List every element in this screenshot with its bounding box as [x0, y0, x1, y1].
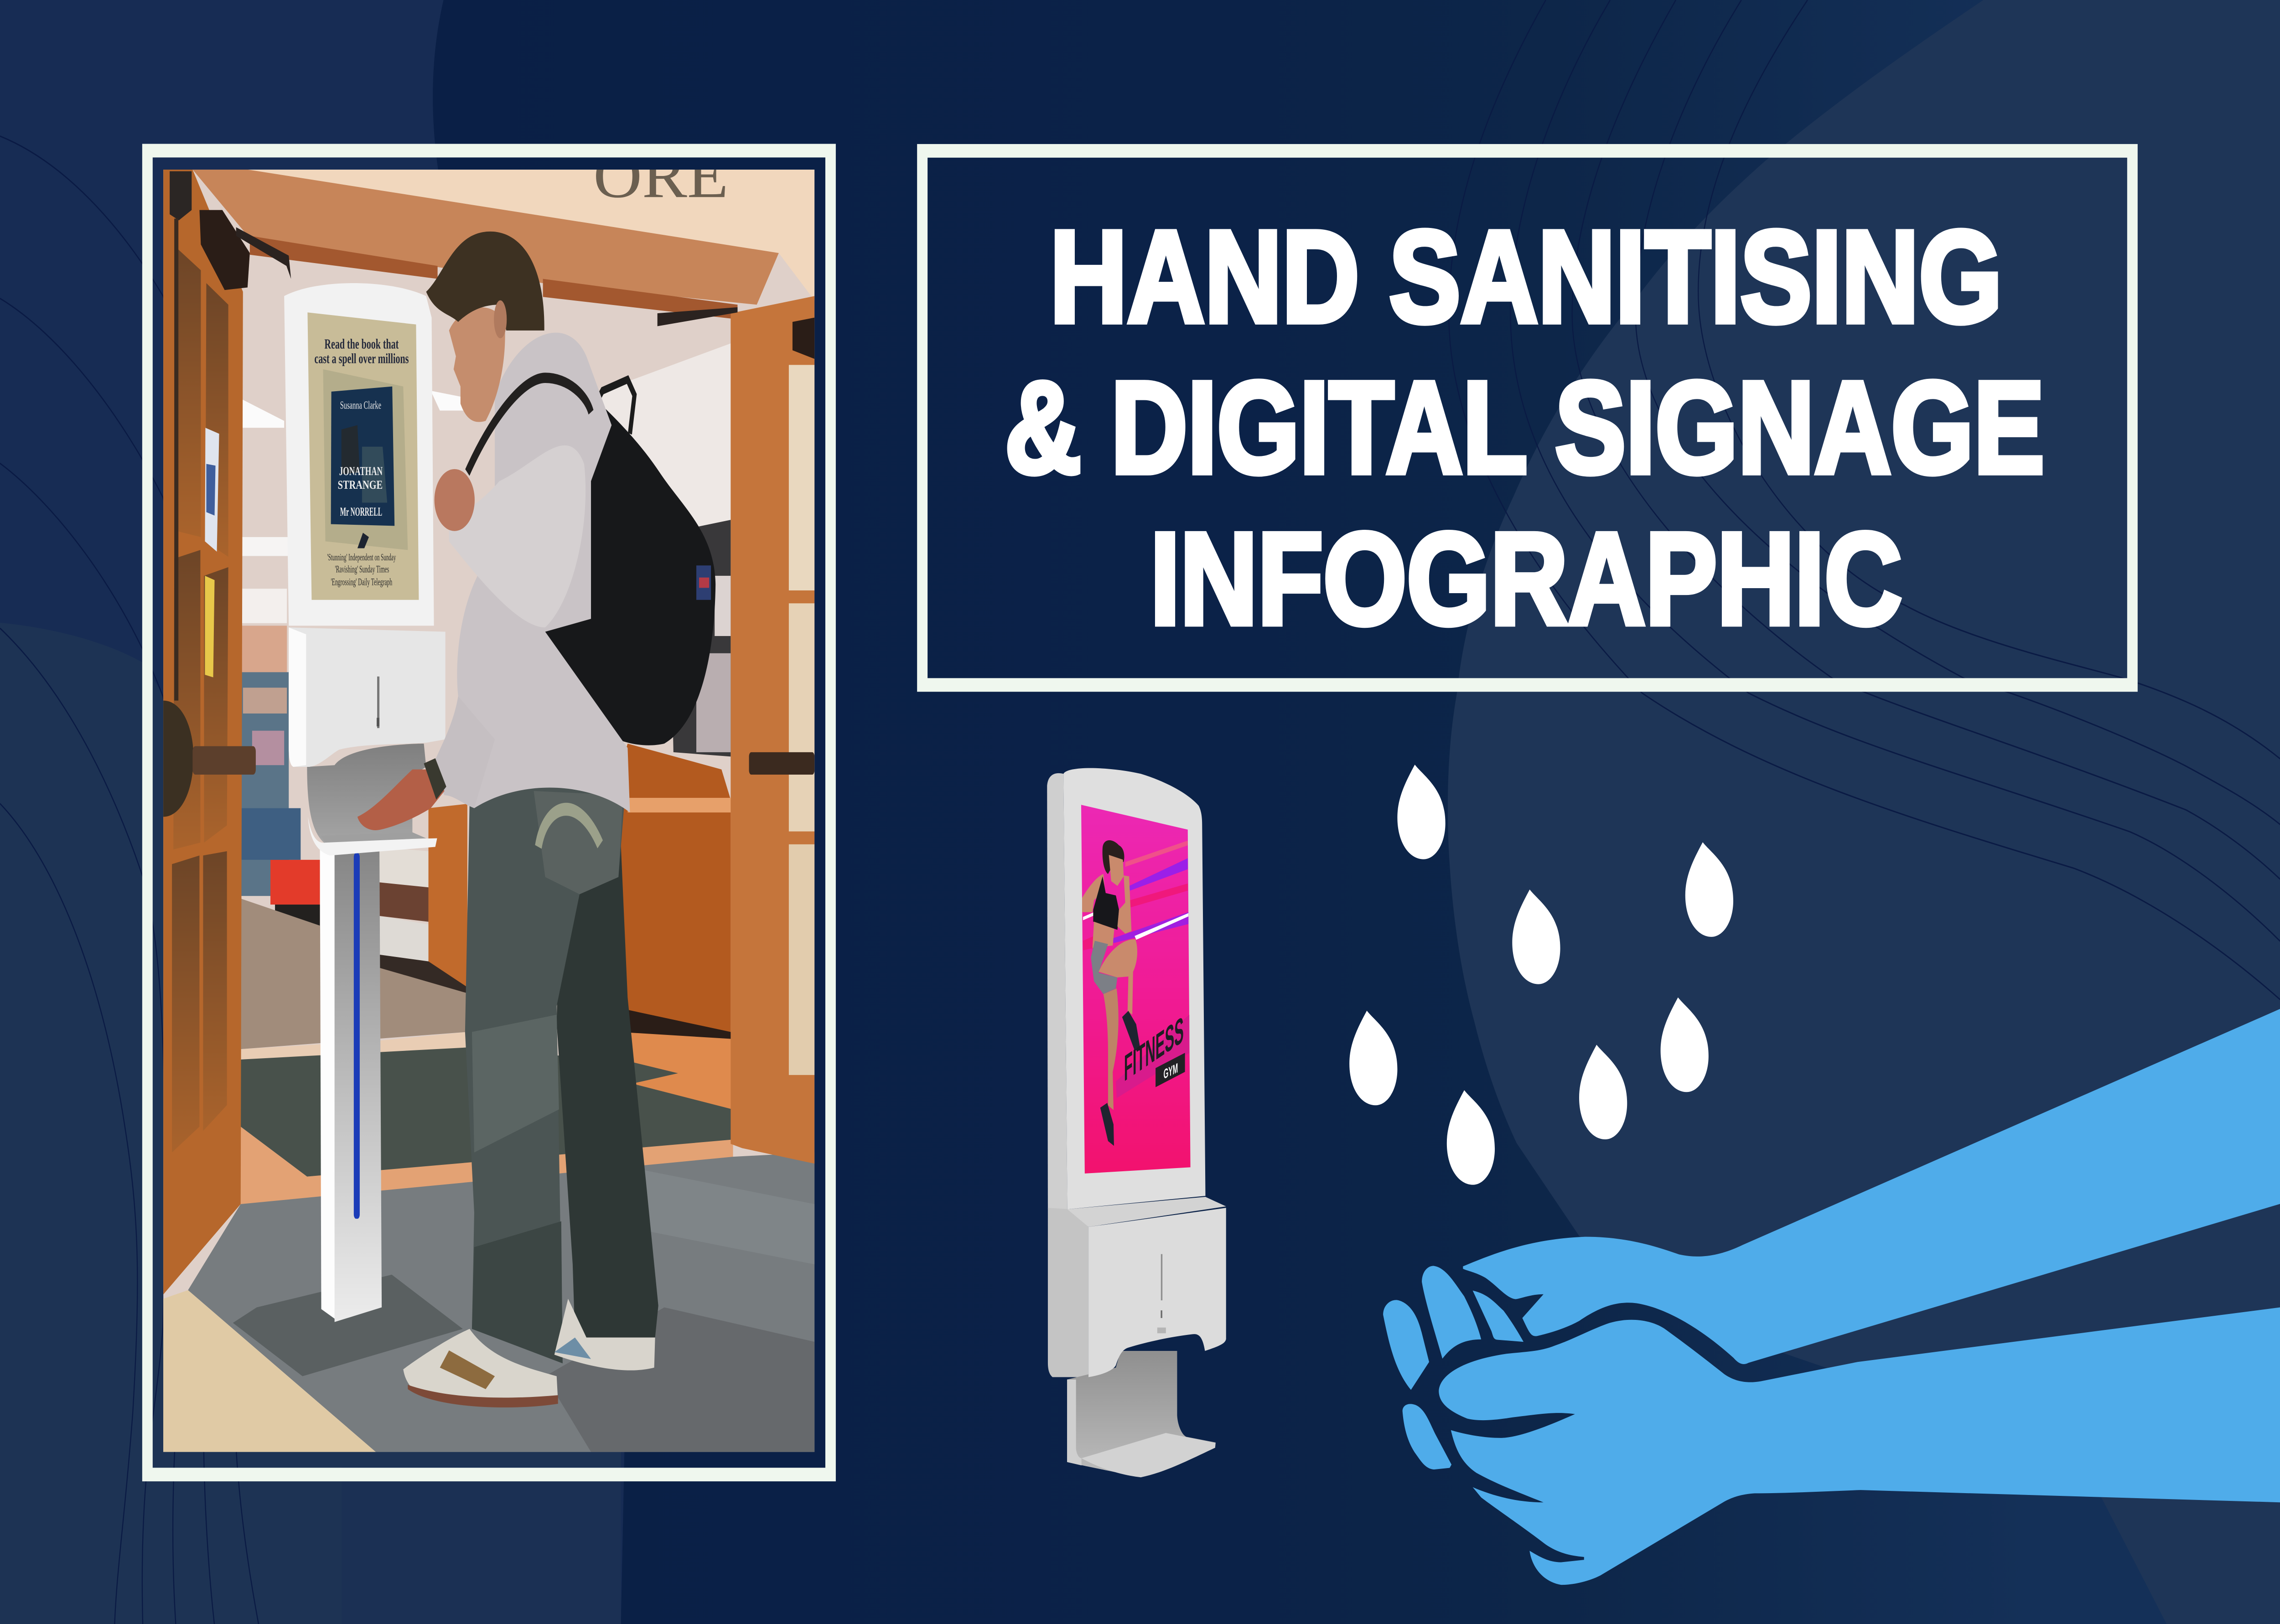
photo: customer using sanitising kiosk in a bookshop	[163, 141, 814, 1452]
drop 3	[1685, 842, 1733, 937]
drop 4	[1349, 1011, 1397, 1105]
store back wall and lights	[241, 343, 731, 673]
store interior backdrop	[163, 170, 814, 1452]
right door	[658, 296, 814, 1164]
poster on kiosk screen: 'Ravishing' Sunday Times	[335, 563, 389, 574]
dispenser top	[1067, 1197, 1226, 1227]
person: hoodie	[431, 333, 630, 812]
kiosk cabinet side	[1047, 773, 1067, 1209]
poster on kiosk screen: STRANGE	[338, 478, 383, 491]
kiosk pole with blue light strip	[320, 847, 382, 1322]
photo panel frame	[147, 150, 830, 1474]
lower arm and hand	[1439, 1308, 2280, 1585]
cream floor	[163, 1290, 376, 1452]
poster on kiosk screen: JONATHAN	[339, 464, 383, 478]
upper hand finger 2	[1473, 1291, 1523, 1342]
person: shoes	[403, 1299, 655, 1407]
lower drip tray	[1067, 1351, 1216, 1477]
kiosk screen cabinet	[284, 283, 434, 626]
kiosk dispenser tray	[307, 744, 437, 855]
background contour lines: top right	[1449, 0, 2280, 999]
kiosk product image with fitness advert	[1047, 768, 1226, 1477]
background contour lines: left	[0, 136, 259, 1624]
kiosk dispenser body	[289, 627, 446, 767]
poster on kiosk screen: cast a spell over millions	[314, 351, 409, 367]
title line 1: HAND SANITISING	[1050, 204, 2002, 350]
kiosk stand base	[233, 1275, 463, 1376]
drop 5	[1661, 998, 1709, 1092]
upper hand finger 1	[1422, 1266, 1481, 1359]
left door	[163, 170, 291, 1294]
dispenser sensor slit	[1157, 1254, 1166, 1333]
drop 2	[1512, 890, 1560, 984]
advert GYM badge: GYM	[1164, 1060, 1178, 1082]
person: head	[426, 232, 544, 422]
advert GYM badge	[1156, 1053, 1185, 1087]
upper wall with store lettering: ORE	[593, 141, 728, 211]
drop 6	[1579, 1045, 1627, 1139]
cupped hands illustration	[1383, 1009, 2280, 1585]
person: jeans	[465, 781, 658, 1363]
grey tile floor	[188, 1153, 814, 1452]
dispenser side	[1048, 1208, 1088, 1377]
title line 3: INFOGRAPHIC	[1150, 506, 1902, 652]
poster on kiosk screen: 'Stunning' Independent on Sunday	[327, 552, 396, 563]
falling sanitiser drops	[1349, 765, 1733, 1185]
fitness advert screen	[1081, 805, 1191, 1174]
poster on kiosk screen: Read the book that	[325, 336, 399, 352]
drop 1	[1397, 765, 1446, 859]
drop 7	[1447, 1090, 1495, 1185]
woman athlete figure	[1082, 840, 1140, 1146]
title frame	[922, 151, 2132, 685]
poster on kiosk screen: 'Engrossing' Daily Telegraph	[331, 576, 392, 588]
poster on kiosk screen	[307, 312, 419, 600]
title	[1005, 204, 2044, 652]
upper wall with store lettering	[249, 170, 814, 300]
dispenser front	[1088, 1208, 1226, 1377]
upper hand finger 3	[1383, 1300, 1429, 1390]
person: hands and watch	[358, 469, 475, 830]
kiosk cabinet front	[1063, 768, 1205, 1209]
door header beam	[192, 170, 779, 319]
store counters	[378, 520, 731, 1039]
poster on kiosk screen: Mr NORRELL	[340, 505, 382, 518]
floor of store	[241, 899, 733, 1208]
upper arm and hand	[1463, 1009, 2280, 1364]
lower hand finger	[1403, 1404, 1451, 1469]
advert wordmark FITNESS: FITNESS	[1124, 1008, 1184, 1089]
poster on kiosk screen: Susanna Clarke	[340, 399, 381, 412]
person: backpack	[513, 379, 715, 745]
store shelves	[241, 672, 320, 927]
title line 2: & DIGITAL SIGNAGE	[1005, 355, 2044, 501]
